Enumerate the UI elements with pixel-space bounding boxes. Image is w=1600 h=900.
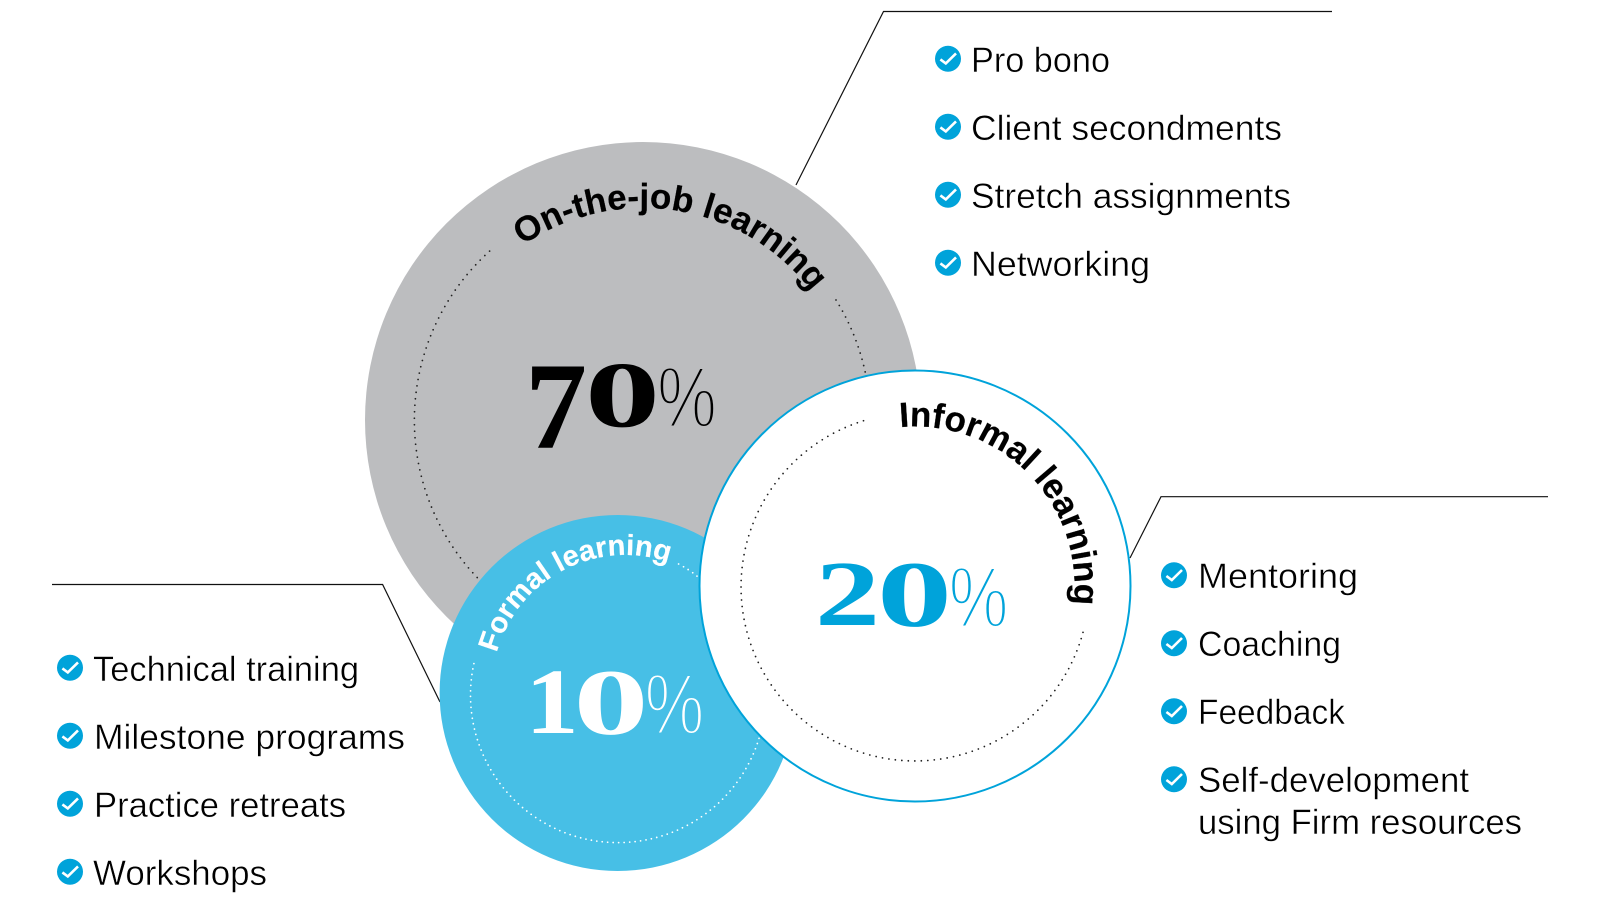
leader line: formal learning (52, 584, 440, 702)
heading: informal learning: Informal learning (900, 402, 1098, 604)
stat: 10 percent: % (645, 657, 704, 753)
list item: Stretch assignments: Stretch assignments (971, 177, 1291, 216)
list item: Self-development using Firm resources (1161, 761, 1522, 842)
list item: Networking: Networking (971, 245, 1150, 284)
heading: on-the-job learning: On-the-job learning (514, 182, 824, 292)
list item: Client secondments: Client secondments (971, 109, 1282, 148)
stat: 20 percent: % (949, 550, 1008, 646)
stat: 70 percent (525, 338, 717, 475)
panel: formal learning circle (440, 515, 784, 871)
leader line: informal learning (1130, 497, 1548, 558)
stat: 20 percent (815, 543, 1008, 647)
panel: informal learning circle (698, 370, 1132, 802)
leader line: on-the-job learning (796, 12, 1332, 185)
stat: 70 percent: 0 (585, 343, 660, 447)
stat: 20 percent: 2 (815, 543, 880, 646)
list item: Self-development using Firm resources: using Firm resources (1198, 803, 1522, 842)
stat: 10 percent: 0 (573, 651, 649, 755)
list item: Milestone programs: Milestone programs (94, 718, 405, 757)
list: on-the-job learning items (935, 41, 1291, 284)
list: formal learning items (57, 650, 405, 893)
list item: Technical training: Technical training (93, 650, 359, 689)
stat: 70 percent: % (657, 350, 717, 446)
list item: Coaching: Coaching (1198, 625, 1341, 664)
list item: Workshops: Workshops (93, 854, 267, 893)
list item: Feedback: Feedback (1198, 693, 1345, 732)
panel: on-the-job learning circle (365, 142, 916, 624)
list item: Mentoring: Mentoring (1198, 557, 1358, 596)
stat: 10 percent: 1 (525, 650, 579, 753)
list item: Practice retreats: Practice retreats (94, 786, 346, 825)
list item: Pro bono: Pro bono (971, 41, 1110, 80)
stat: 10 percent (525, 650, 704, 755)
list: informal learning items (1161, 557, 1522, 842)
stat: 20 percent: 0 (877, 543, 952, 647)
heading: formal learning: Formal learning (478, 534, 671, 652)
stat: 70 percent: 7 (525, 338, 587, 475)
list item: Self-development using Firm resources: Self-development (1198, 761, 1469, 800)
